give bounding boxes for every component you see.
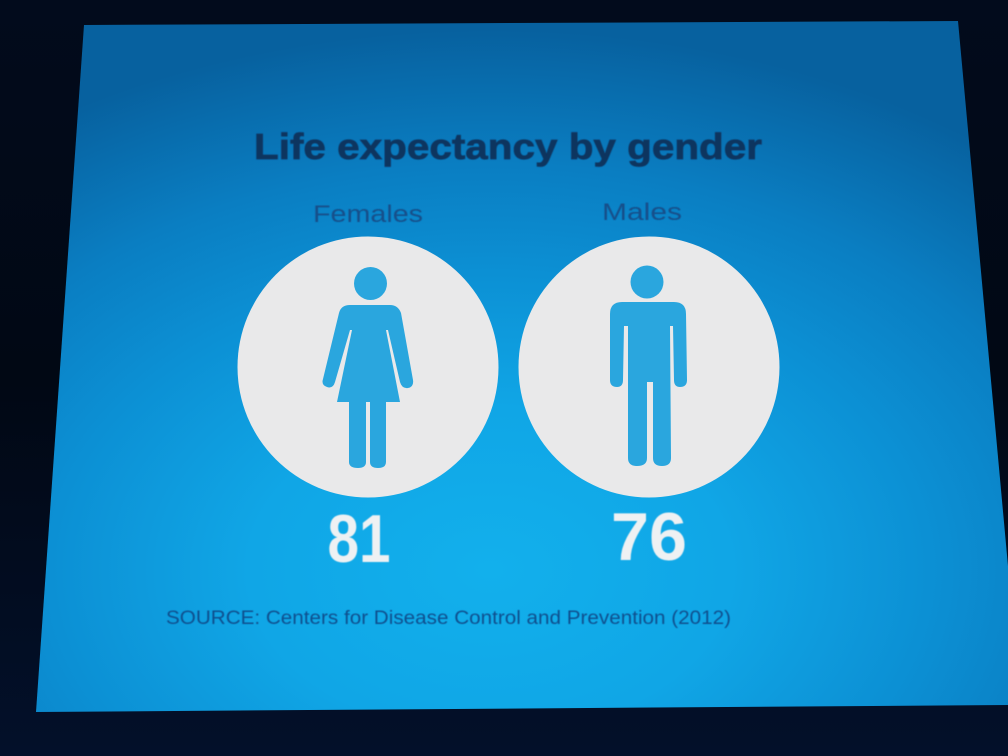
value: males 76: 76 xyxy=(611,499,687,575)
icon: female figure xyxy=(322,267,413,468)
label: Males: Males xyxy=(602,199,682,226)
female icon circle xyxy=(238,236,498,498)
title: Life expectancy by gender xyxy=(254,126,762,167)
source note: SOURCE: Centers for Disease Control and Prevention (2012) xyxy=(166,608,731,629)
value: females 81: 81 xyxy=(328,501,390,577)
male icon circle xyxy=(518,236,780,498)
label: Females: Females xyxy=(313,201,423,228)
icon: male figure xyxy=(610,266,687,466)
